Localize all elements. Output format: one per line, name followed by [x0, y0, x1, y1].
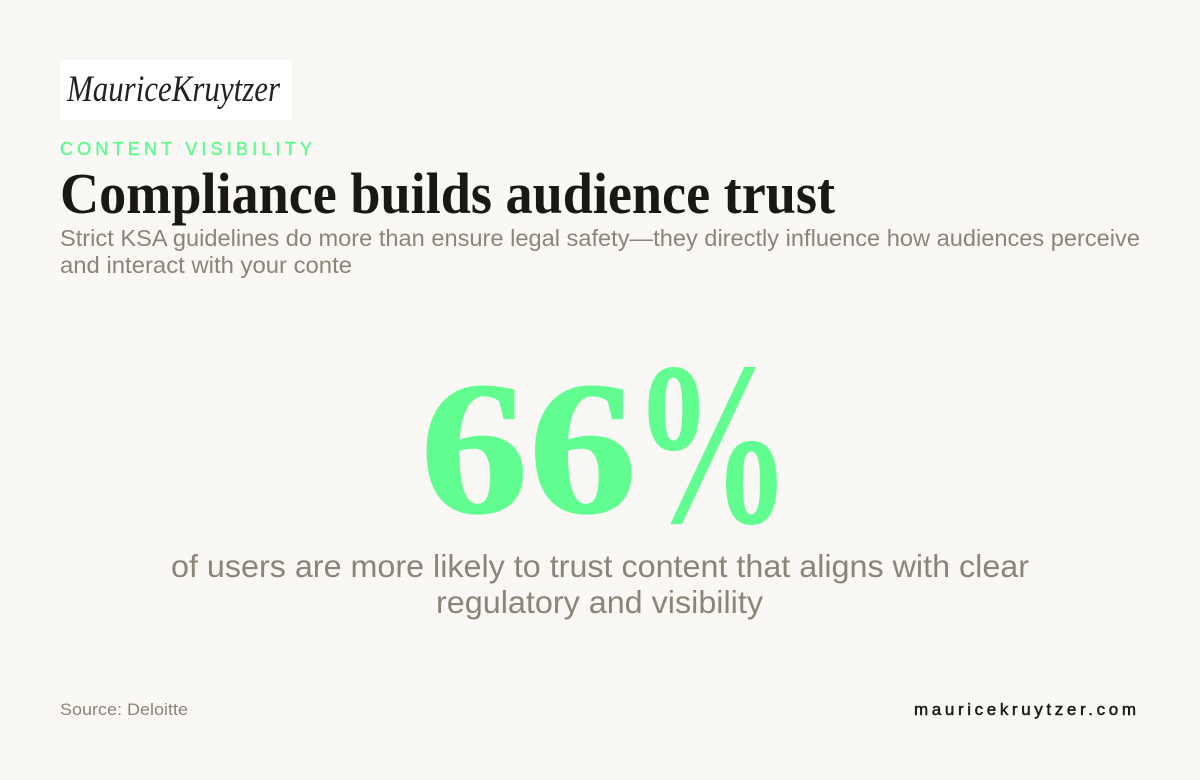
title: Compliance builds audience trust	[60, 161, 836, 226]
subtitle: and interact with your conte	[60, 252, 352, 278]
big stat: 66%	[420, 316, 792, 573]
website: mauricekruytzer.com	[914, 700, 1136, 719]
big stat: 66%: 66	[420, 344, 637, 554]
big stat: 66%: %	[632, 316, 792, 573]
stat description	[171, 548, 1029, 620]
logo: MauriceKruytzer	[66, 69, 280, 110]
logo	[60, 60, 292, 120]
source: Source: Deloitte	[60, 700, 188, 719]
eyebrow: CONTENT VISIBILITY	[60, 139, 312, 159]
stat description: of users are more likely to trust content that aligns with clear	[171, 548, 1029, 584]
subtitle	[60, 225, 1140, 278]
stat description: regulatory and visibility	[436, 584, 763, 620]
subtitle: Strict KSA guidelines do more than ensure legal safety—they directly influence how audiences perceive	[60, 225, 1140, 251]
